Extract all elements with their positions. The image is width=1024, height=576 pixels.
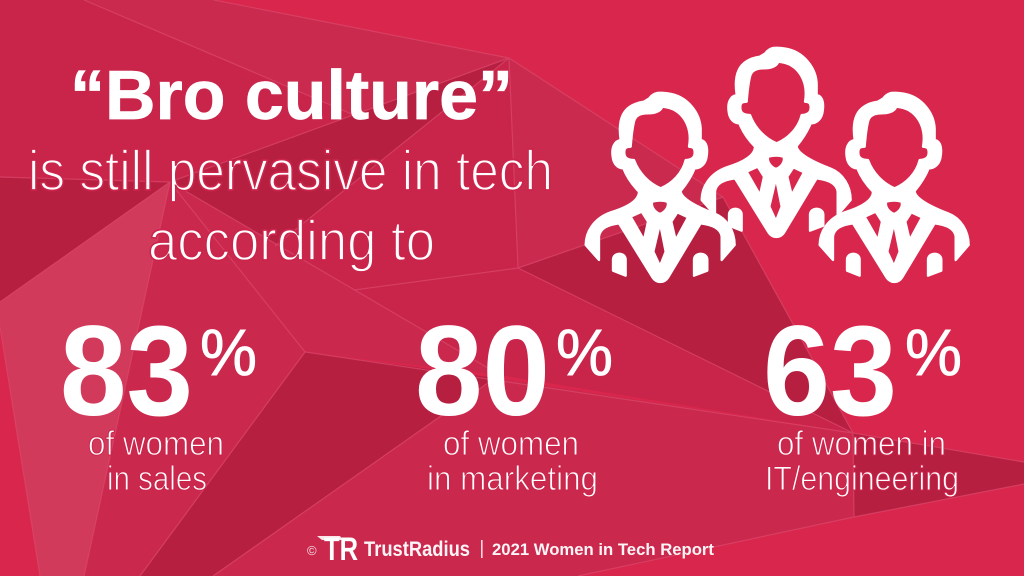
divider bar: [481, 540, 483, 558]
stat number 80: 80: [415, 300, 550, 443]
label second line: in sales: [107, 460, 207, 498]
label: of women: [443, 425, 579, 463]
copyright mark: ©: [307, 543, 317, 558]
label second line: in marketing: [427, 460, 598, 498]
stat: 83% of women in sales: [60, 300, 257, 498]
label second line: IT/engineering: [765, 460, 959, 498]
stat number 83: 83: [60, 300, 193, 443]
icon: three men in suits: [586, 48, 969, 282]
report name: 2021 Women in Tech Report: [492, 541, 714, 559]
stat number 63: 63: [763, 300, 897, 443]
percent sign: %: [200, 315, 257, 389]
stat: 80% of women in marketing: [415, 300, 613, 498]
logo mark: TR: [317, 531, 358, 567]
title: Bro culture: “Bro culture”: [70, 56, 513, 134]
logo wordmark: TrustRadius: [364, 538, 470, 561]
label: of women: [88, 425, 224, 463]
stat: 63% of women in IT/engineering: [763, 300, 962, 498]
footer: logo and report credit: [307, 531, 714, 567]
percent sign: %: [556, 315, 613, 389]
subtitle line 1: is still pervasive in tech: [28, 139, 553, 203]
percent sign: %: [905, 315, 962, 389]
logo mark: TR: TR: [324, 531, 358, 567]
subtitle line 2: according to: [148, 209, 435, 273]
label: of women in: [777, 425, 946, 463]
